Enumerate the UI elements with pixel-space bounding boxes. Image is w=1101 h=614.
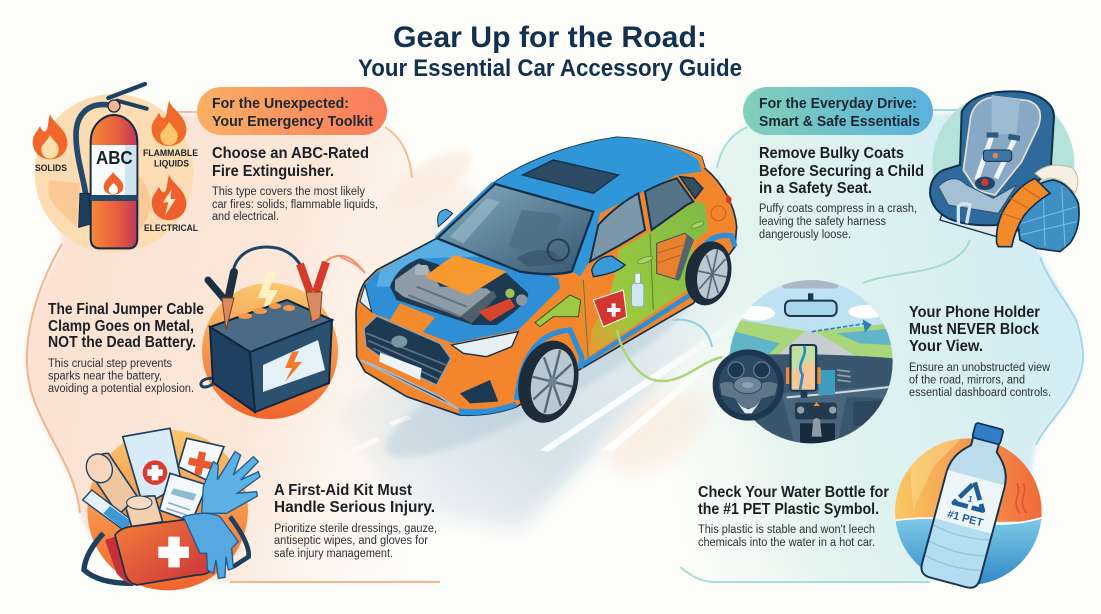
text block: child seat: in a Safety Seat. [759,180,872,197]
icon: water bottle with recycling symbol [893,418,1043,590]
left mirror [438,209,453,227]
title: Your Essential Car Accessory Guide [358,55,742,82]
jacket sleeve [996,178,1050,247]
text block: phone holder: essential dashboard controls. [909,387,1051,399]
text block: phone holder: Must NEVER Block [909,321,1039,338]
heading pill: everyday drive: Smart & Safe Essentials [759,114,920,130]
text block: water bottle: the #1 PET Plastic Symbol. [698,501,879,518]
text block: fire extinguisher: This type covers the most likely [212,186,365,198]
side windows [590,193,645,262]
text block: jumper cable [48,301,204,395]
title [358,21,742,82]
text block: phone holder: Your Phone Holder [909,304,1040,321]
text block: fire extinguisher: car fires: solids, flammable liquids, [212,199,378,211]
text block: child seat: leaving the safety harness [759,216,886,228]
seat inner [963,97,1040,195]
text block: jumper cable: This crucial step prevents [48,358,172,370]
panel: emergency toolkit background [26,112,505,582]
labels: fire classes [35,148,198,233]
text block: phone holder: Ensure an unobstructed view [909,362,1051,374]
labels: fire classes: LIQUIDS [154,158,189,168]
text block: fire extinguisher: and electrical. [212,211,279,223]
text block: fire extinguisher: Choose an ABC-Rated [212,145,369,162]
front wheel [510,330,587,429]
arrow: red connector from toolkit to car [340,257,365,273]
labels: fire classes: FLAMMABLE [143,148,198,158]
text block: first-aid kit [274,482,437,560]
text block: child seat: Remove Bulky Coats [759,145,904,162]
flame: flammable liquids [152,101,186,146]
icon: water bottle with recycling symbol: 1 [967,493,974,504]
seat shell [930,91,1054,225]
text block: first-aid kit: Handle Serious Injury. [274,499,435,516]
text block: first-aid kit: A First-Aid Kit Must [274,482,412,499]
icon: battery and jumper cables [201,247,365,419]
text block: phone holder: of the road, mirrors, and [909,374,1025,386]
text block: child seat [759,145,924,241]
text block: water bottle: Check Your Water Bottle for [698,484,889,501]
text block: jumper cable: avoiding a potential explosion. [48,383,194,395]
text block: fire extinguisher: Fire Extinguisher. [212,163,334,180]
icon: water bottle with recycling symbol: #1 PET [946,508,985,530]
text block: child seat: Before Securing a Child [759,163,924,180]
seat base [940,210,1020,237]
icon: dashboard with phone holder [713,278,893,447]
hood [361,238,560,343]
title: Gear Up for the Road: [393,21,707,54]
text block: first-aid kit: antiseptic wipes, and gloves for [274,535,428,547]
panel: everyday drive background [610,110,1083,582]
icon: fire extinguisher with flames [33,84,193,253]
heading pill: emergency toolkit: For the Unexpected: [212,96,349,112]
icon: fire extinguisher with flames: ABC [96,147,133,168]
jacket body [1017,180,1079,252]
text block: water bottle [698,484,889,549]
headlight [452,332,518,357]
heading pill: emergency toolkit [197,87,387,135]
heading pill: everyday drive [743,87,933,135]
text block: fire extinguisher [212,145,378,223]
heading pill: everyday drive: For the Everyday Drive: [759,96,917,112]
illustration: car [356,137,737,484]
lower bumper [360,360,460,410]
sill [582,295,690,365]
text block: jumper cable: Clamp Goes on Metal, [48,318,194,335]
text block: jumper cable: The Final Jumper Cable [48,301,204,318]
text block: first-aid kit: Prioritize sterile dressings, gauze, [274,523,437,535]
labels: fire classes: ELECTRICAL [144,223,198,233]
icon: first-aid kit [82,428,260,590]
text block: jumper cable: NOT the Dead Battery. [48,334,196,351]
text block: jumper cable: sparks near the battery, [48,370,162,382]
text block: phone holder: Your View. [909,338,983,355]
steering wheel [716,352,781,418]
text block: child seat: dangerously loose. [759,229,851,241]
arrow: green connector from car to dashboard [617,330,722,381]
fur hood [1035,165,1078,193]
door items [657,233,693,280]
text block: water bottle: This plastic is stable and won't leech [698,524,875,536]
car body [356,137,737,415]
text block: child seat: Puffy coats compress in a crash, [759,203,917,215]
heading pill: emergency toolkit: Your Emergency Toolkit [212,114,373,130]
labels: fire classes: SOLIDS [35,163,67,173]
rear wheel [679,235,737,310]
road behind the car [333,130,840,530]
door panels [588,202,708,357]
flame: solids [33,114,67,159]
text block: water bottle: chemicals into the water in a hot car. [698,537,875,549]
text block: phone holder [909,304,1051,399]
text block: first-aid kit: safe injury management. [274,548,393,560]
right mirror [592,256,625,277]
grille [364,316,451,385]
flame: electrical [152,175,186,220]
windshield [437,184,593,274]
icon: child seat with puffy coat [930,91,1079,252]
